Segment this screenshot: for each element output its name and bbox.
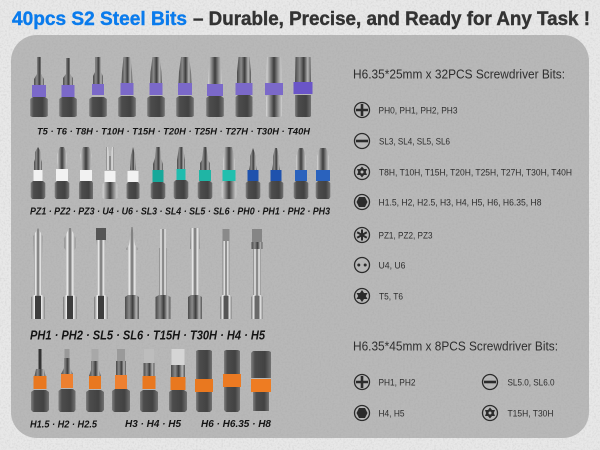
bit: SL6: [222, 147, 236, 199]
bit: H4: [140, 349, 158, 412]
row 2: PZ, U, SL, PH bits: [31, 147, 330, 199]
bit: T20H: [176, 57, 194, 117]
row 3: long bits: [31, 227, 263, 319]
label row 4: [30, 418, 271, 430]
bit: H6.35: [223, 350, 241, 412]
bit: PZ2: [55, 147, 69, 199]
spec: torx hollow: [354, 164, 572, 180]
title: – Durable, Precise, and Ready for Any Task !: [193, 9, 590, 30]
bit: T15H long: [156, 229, 170, 319]
bit: H1.5: [31, 349, 49, 412]
spec: long slotted: SL5.0, SL6.0: [508, 378, 554, 388]
bit: PH1 long: [31, 228, 45, 319]
spec: torx: T5, T6: [379, 292, 403, 302]
label row 1: T5 · T6 · T8H · T10H · T15H · T20H · T25H · T27H · T30H · T40H: [37, 126, 311, 138]
bit: PZ1: [31, 147, 45, 199]
bit: T30H long: [188, 228, 202, 319]
bit: T25H: [206, 57, 224, 117]
bit: SL5 long: [94, 228, 108, 319]
spec: hex: [354, 194, 542, 210]
spec: slotted: [354, 134, 450, 148]
bit: H5: [169, 349, 187, 412]
bit: PZ3: [79, 147, 93, 199]
bit: T27H: [236, 57, 252, 117]
bit: H5 long: [251, 229, 263, 319]
spec: phillips: PH0, PH1, PH2, PH3: [378, 106, 458, 116]
spec: long phillips: PH1, PH2: [378, 378, 416, 388]
bit: PH0: [246, 148, 260, 199]
spec: pozidriv: PZ1, PZ2, PZ3: [378, 230, 432, 242]
spec: pozidriv: [354, 228, 432, 242]
spec: long torx: [482, 406, 554, 420]
spec: long hex: [354, 406, 404, 420]
bit: PH1: [269, 148, 283, 199]
bit: T5: [30, 57, 48, 117]
bit: T6: [59, 58, 77, 117]
bit: H6: [195, 350, 213, 412]
spec: long torx: T15H, T30H: [508, 408, 554, 420]
spec: long slotted: [482, 374, 554, 390]
row 1: torx bits: [30, 57, 312, 117]
spec: spanner: [354, 258, 406, 272]
bit: H3: [112, 349, 130, 412]
heading: 45mm bits: H6.35*45mm x 8PCS Screwdriver Bits:: [353, 338, 558, 354]
spec: spanner: U4, U6: [378, 260, 406, 272]
label row 3: PH1 · PH2 · SL5 · SL6 · T15H · T30H · H4 · H5: [30, 328, 266, 342]
bit: T30H: [265, 57, 283, 117]
bit: H4 long: [220, 229, 232, 319]
spec: torx hollow: T8H, T10H, T15H, T20H, T25H, T27H, T30H, T40H: [379, 168, 572, 178]
spec: torx: [354, 288, 403, 304]
bit: PH3: [316, 148, 330, 199]
bit: H8: [251, 351, 271, 411]
spec: long hex: H4, H5: [378, 408, 404, 420]
label row 4: H6 · H6.35 · H8: [201, 418, 271, 430]
label row 2: PZ1 · PZ2 · PZ3 · U4 · U6 · SL3 · SL4 · SL5 · SL6 · PH0 · PH1 · PH2 · PH3: [30, 206, 330, 218]
spec: long phillips: [354, 374, 416, 390]
bit: SL5: [198, 147, 212, 199]
bit: SL3: [151, 147, 165, 199]
bit: T8H: [89, 57, 107, 117]
spec: slotted: SL3, SL4, SL5, SL6: [379, 136, 450, 148]
bit: T40H: [294, 57, 312, 117]
bit: T10H: [118, 57, 136, 117]
heading: 25mm bits: H6.35*25mm x 32PCS Screwdriver Bits:: [353, 66, 565, 82]
bit: H2: [58, 349, 76, 412]
bit: PH2 long: [63, 228, 77, 319]
label row 4: H3 · H4 · H5: [125, 418, 181, 430]
bit: U4: [103, 147, 117, 199]
row 4: hex bits: [31, 349, 271, 412]
title: 40pcs S2 Steel Bits: [12, 9, 187, 30]
bit: SL4: [174, 147, 188, 199]
bit: SL6 long: [125, 227, 139, 319]
bit: H2.5: [86, 349, 104, 412]
label row 4: H1.5 · H2 · H2.5: [30, 418, 97, 430]
bit: U6: [126, 147, 140, 199]
bit: T15H: [147, 57, 165, 117]
bit: PH2: [294, 148, 308, 199]
spec: phillips: [354, 102, 458, 118]
spec: hex: H1.5, H2, H2.5, H3, H4, H5, H6, H6.35, H8: [378, 198, 542, 208]
